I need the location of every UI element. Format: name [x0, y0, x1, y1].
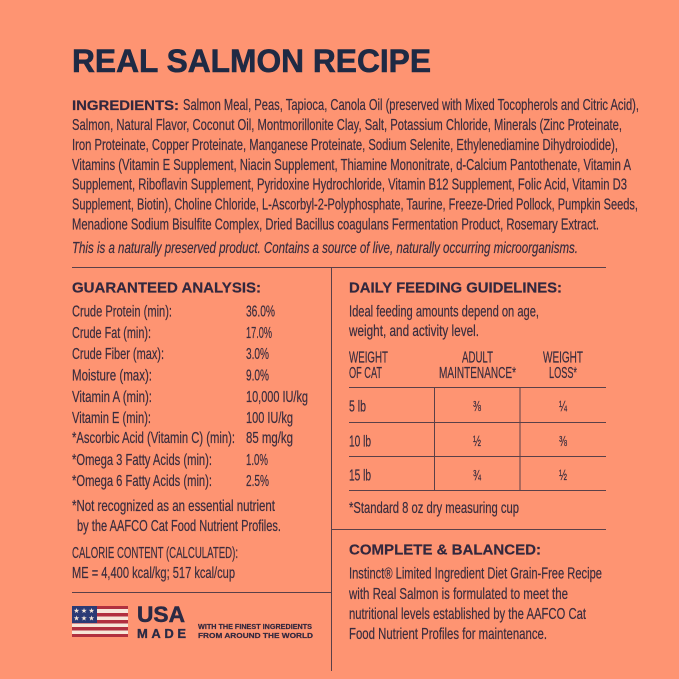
feeding table: ½ — [559, 467, 567, 484]
feeding table: ⅜ — [559, 433, 567, 450]
panel: complete and balanced — [348, 542, 602, 643]
feeding table: 10 lb — [349, 434, 371, 450]
panel: guaranteed analysis — [72, 280, 308, 582]
icon: american flag: ★ — [81, 614, 87, 622]
feeding intro text: weight, and activity level. — [348, 323, 479, 340]
feeding table: ⅜ — [473, 398, 481, 415]
nutrient table: 9.0% — [246, 368, 269, 384]
nutrient table: *Omega 6 Fatty Acids (min): — [72, 473, 212, 490]
balanced body text: Food Nutrient Profiles for maintenance. — [349, 626, 547, 643]
calorie content — [72, 545, 238, 582]
feeding intro text — [348, 304, 539, 340]
logo: usa made: USA — [137, 602, 185, 627]
feeding table: LOSS* — [549, 365, 577, 382]
feeding table: WEIGHT — [543, 350, 583, 366]
heading: complete and balanced: COMPLETE & BALANCED: — [349, 542, 541, 558]
feeding table — [349, 350, 606, 490]
balanced body text: nutritional levels established by the AAFCO Cat — [349, 606, 586, 623]
feeding table: WEIGHT — [349, 350, 388, 366]
footnote: *Not recognized as an essential nutrient — [72, 498, 275, 515]
icon: american flag: ★ — [73, 607, 80, 615]
nutrient table: Vitamin A (min): — [72, 389, 152, 406]
tagline: WITH THE FINEST INGREDIENTS — [198, 624, 312, 631]
balanced body text: with Real Salmon is formulated to meet the — [348, 586, 568, 603]
calorie content: ME = 4,400 kcal/kg; 517 kcal/cup — [72, 565, 235, 582]
feeding table: OF CAT — [349, 365, 382, 382]
nutrient table: 3.0% — [246, 346, 269, 363]
balanced body text — [348, 566, 602, 643]
icon: american flag: ★ — [88, 607, 95, 615]
logo: usa made: MADE — [137, 626, 186, 641]
heading: feeding guidelines: DAILY FEEDING GUIDELINES: — [349, 280, 562, 296]
nutrient table: 85 mg/kg — [246, 430, 293, 447]
icon: american flag — [72, 606, 128, 637]
footnote — [72, 498, 281, 535]
calorie content: CALORIE CONTENT (CALCULATED): — [72, 545, 238, 562]
nutrient table: *Ascorbic Acid (Vitamin C) (min): — [72, 430, 235, 447]
nutrient table: *Omega 3 Fatty Acids (min): — [72, 452, 212, 469]
feeding table: MAINTENANCE* — [439, 365, 516, 382]
tagline: FROM AROUND THE WORLD — [198, 633, 313, 640]
title: REAL SALMON RECIPE — [72, 43, 431, 79]
feeding table: ¾ — [473, 467, 481, 484]
measuring cup footnote: *Standard 8 oz dry measuring cup — [349, 500, 519, 517]
tagline — [198, 624, 313, 640]
nutrient table: Crude Fiber (max): — [72, 346, 164, 363]
heading: guaranteed analysis: GUARANTEED ANALYSIS: — [72, 280, 261, 296]
ingredients text block: INGREDIENTS: — [72, 97, 179, 113]
nutrient table: 100 IU/kg — [246, 410, 293, 427]
nutrient table: Moisture (max): — [72, 368, 152, 384]
feeding table: 15 lb — [349, 468, 371, 484]
nutrient table: 17.0% — [246, 325, 272, 342]
feeding table: 5 lb — [349, 398, 366, 416]
feeding table: ADULT — [462, 350, 493, 366]
nutrient table: 10,000 IU/kg — [246, 389, 308, 406]
ingredients text block — [72, 97, 639, 234]
nutrient table: Vitamin E (min): — [72, 410, 151, 427]
logo: usa made — [137, 602, 186, 641]
nutrient table — [72, 304, 308, 490]
feeding intro text: Ideal feeding amounts depend on age, — [349, 304, 539, 320]
nutrient table: 36.0% — [246, 304, 275, 320]
feeding table: ¼ — [559, 398, 567, 415]
icon: american flag: ★ — [73, 614, 80, 622]
nutrient table: 2.5% — [246, 473, 269, 490]
footnote: by the AAFCO Cat Food Nutrient Profiles. — [77, 518, 281, 535]
nutrient table: 1.0% — [246, 452, 268, 469]
icon: american flag: ★ — [81, 607, 87, 615]
nutrient table: Crude Protein (min): — [72, 304, 172, 320]
nutrient table: Crude Fat (min): — [72, 325, 151, 342]
feeding table: ½ — [473, 433, 481, 450]
icon: american flag: ★ — [88, 614, 95, 622]
panel: daily feeding guidelines — [348, 280, 606, 517]
